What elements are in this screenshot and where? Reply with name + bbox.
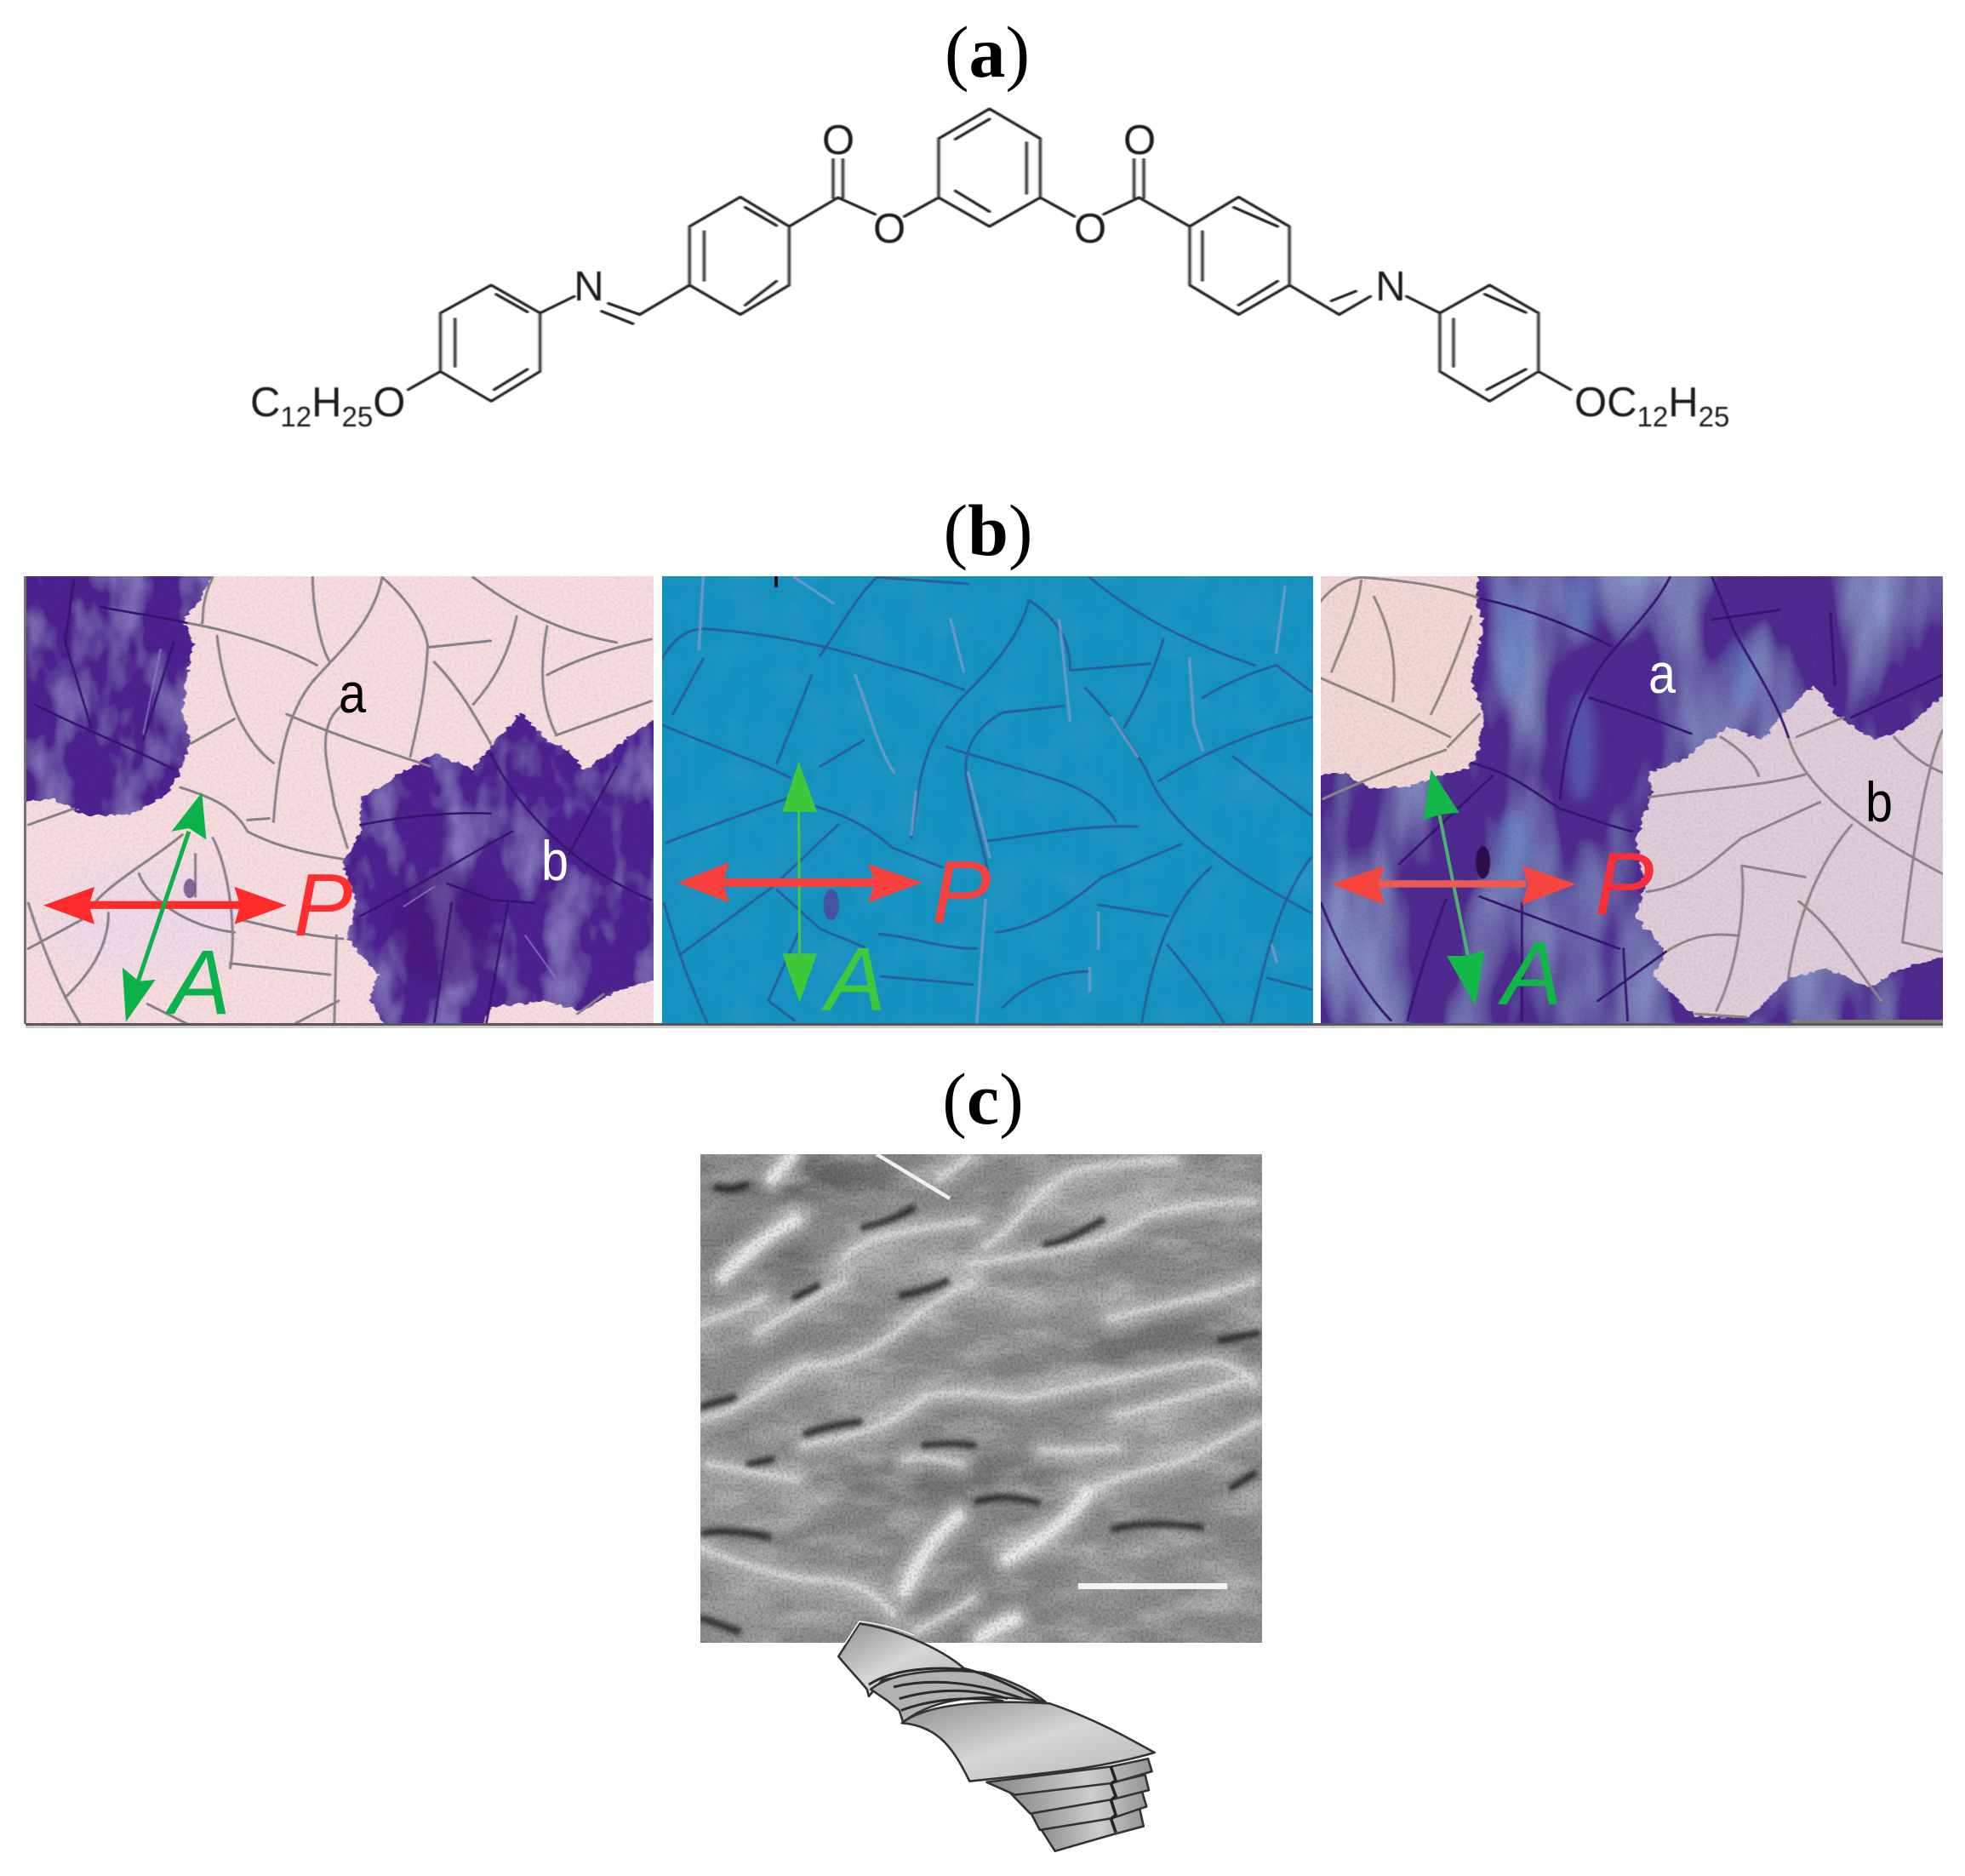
label: A: A — [1497, 924, 1562, 1024]
panel b: left micrograph — [22, 574, 660, 1033]
label: A: A — [820, 929, 886, 1030]
SEM grain — [700, 1154, 1262, 1643]
label: b: b — [1865, 770, 1893, 833]
lilac tint — [43, 860, 247, 979]
atom labels: 12 — [1637, 401, 1668, 432]
label: a: a — [1648, 642, 1676, 705]
texture — [26, 576, 654, 1024]
panel c: SEM micrograph — [684, 1154, 1262, 1643]
SEM bright ridges — [700, 1157, 1259, 1638]
arrow: polarizer P — [677, 862, 923, 902]
heading: (a): (a) — [945, 11, 1030, 93]
twisted edge lines — [869, 1668, 1042, 1710]
atom labels: H — [1668, 380, 1699, 426]
panel b: edges and baseline — [24, 576, 1943, 1028]
label: P: P — [294, 856, 352, 955]
atom labels: 25 — [342, 401, 373, 432]
left micrograph base — [26, 576, 654, 1024]
atom labels: O — [822, 117, 854, 163]
texture — [1321, 576, 1943, 1024]
cracks on purple area — [35, 581, 651, 1024]
atom labels: OC — [1574, 380, 1637, 426]
right micrograph base — [1321, 576, 1943, 1024]
structure bonds — [408, 109, 1571, 401]
top lamella — [838, 1624, 964, 1696]
illustration: twisted lamellae stack — [838, 1621, 1155, 1851]
panel a: chemical structure — [250, 109, 1729, 432]
middle micrograph base — [662, 576, 1313, 1024]
label: a: a — [339, 661, 366, 724]
scale bar — [1078, 1583, 1227, 1589]
atom labels: O — [373, 380, 405, 426]
atom labels: N — [1375, 264, 1406, 310]
cracks — [660, 577, 1311, 1024]
arrow: polarizer P — [43, 887, 287, 924]
bottom strip — [1792, 1020, 1943, 1024]
heading: (c): (c) — [942, 1058, 1024, 1140]
large front lamella — [902, 1702, 1155, 1782]
arrow: analyzer A — [123, 792, 206, 1022]
bright domains — [1315, 574, 1949, 1017]
atom labels: O — [1074, 206, 1106, 252]
label: P: P — [932, 844, 991, 942]
purple domains — [22, 574, 660, 1027]
label: P: P — [1595, 835, 1654, 934]
atom labels: 25 — [1699, 401, 1729, 432]
needle streak — [877, 1154, 950, 1198]
SEM tonal shading — [684, 1159, 1262, 1633]
atom labels: H — [311, 380, 342, 426]
label: b: b — [541, 829, 568, 892]
notch marks — [1111, 1767, 1116, 1833]
arrow: polarizer P — [1332, 866, 1576, 905]
SEM shadows — [702, 1185, 1259, 1631]
cracks on bright area — [28, 577, 651, 1024]
atom labels: 12 — [280, 401, 311, 432]
atom labels: O — [873, 206, 905, 252]
SEM base — [700, 1154, 1262, 1643]
arrow: analyzer A — [1424, 769, 1485, 1006]
blue streaks — [1494, 574, 1756, 896]
atom labels: N — [574, 264, 604, 310]
cracks — [1319, 577, 1943, 1021]
lower lamellae — [986, 1759, 1152, 1851]
label: A: A — [164, 930, 231, 1033]
arrow: analyzer A — [782, 761, 817, 1003]
middle lamellae — [871, 1671, 1046, 1722]
top fringe — [844, 1621, 915, 1644]
atom labels: C — [250, 380, 280, 426]
panel b: middle micrograph — [660, 576, 1313, 1030]
stray mark — [774, 576, 778, 587]
atom labels — [250, 117, 1729, 432]
panel b: right micrograph — [1315, 574, 1949, 1024]
heading: (b): (b) — [943, 489, 1033, 571]
atom labels: O — [1123, 117, 1156, 163]
SEM ridge halos — [700, 1157, 1259, 1638]
SEM bumpy relief — [700, 1154, 1262, 1643]
